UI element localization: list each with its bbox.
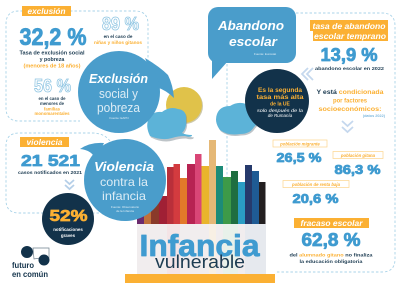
stat: 32,2 %: 32,2 %: [20, 24, 86, 51]
bubble: Violencia contra la infancia: infancia: [102, 189, 146, 203]
icon: chevrons down: [65, 180, 74, 189]
bubble: Abandono escolar: Abandono: [217, 19, 284, 33]
icon: blue cloud right: [216, 103, 260, 136]
stat: 20,6 %: 20,6 %: [292, 191, 339, 206]
stat: 56 %: 56 %: [34, 76, 71, 96]
stat: 89 %: 89 %: [102, 14, 139, 34]
text: menores: [34, 96, 70, 116]
circle: 52 %: 52%: [50, 208, 88, 225]
circle: segunda tasa: Es la segunda: [258, 88, 303, 94]
circle: segunda tasa: [245, 69, 309, 133]
text: tasa de exclusión: (menores de 18 años): [24, 64, 81, 70]
circle: 52 %: [42, 193, 94, 245]
text: casos notificados: casos notificados en 2021: [18, 170, 82, 176]
stat: 86,3 %: 86,3 %: [334, 162, 381, 177]
stat: 26,5 %: 26,5 %: [276, 150, 322, 165]
panel: violencia: [18, 137, 94, 245]
bubble: Violencia contra la infancia: de la Infancia: [116, 209, 134, 213]
circle: segunda tasa: de la UE: [270, 102, 291, 108]
text: menores: menores de: [40, 101, 65, 106]
text: alumnado gitano: la educación obligatoria: [300, 259, 363, 264]
text: niñas y niños: en el caso de: [104, 34, 133, 39]
text: tasa de exclusión: y pobreza: [40, 57, 64, 63]
pencils chart: [137, 140, 266, 225]
tag: población de renta baja: [283, 180, 349, 188]
text: tasa de exclusión: [20, 50, 85, 70]
text: menores: en el caso de: [38, 96, 66, 101]
logo: futuro en común: futuro: [12, 261, 34, 270]
bubble: Exclusión social y pobreza: Fuente: EAPN: [109, 116, 129, 120]
stat: 13,9 %: 13,9 %: [320, 45, 378, 65]
text: condicionada: (datos 2022): [363, 114, 386, 118]
tag: población gitana: población gitana: [340, 153, 376, 158]
bubble: Abandono escolar: escolar: [229, 35, 278, 49]
tag: tasa de abandono: escolar temprano: [314, 32, 386, 41]
circle: 52 %: notificaciones: [53, 227, 83, 232]
circle: segunda tasa: de Rumanía: [268, 113, 293, 118]
panel: abandono escolar temprano: [273, 20, 388, 264]
logo: futuro en común: [12, 246, 50, 279]
tag: población gitana: [333, 152, 383, 158]
text: menores: monomarentales: [34, 111, 70, 116]
bubble: Abandono escolar: Fuente: Eurostat: [254, 52, 276, 56]
text: condicionada: socioeconómicos:: [318, 106, 382, 113]
bubble: Violencia contra la infancia: Fuente: Observatorio: [111, 205, 139, 209]
tag: población migrante: población migrante: [279, 141, 320, 146]
text: niñas y niños: niñas y niños gitanos: [94, 40, 142, 45]
title panel: [137, 224, 266, 274]
text: condicionada: Y está condicionada: [316, 89, 384, 96]
bubble: Abandono escolar: [208, 7, 296, 79]
tag: tasa de abandono: tasa de abandono: [312, 22, 386, 31]
circle: segunda tasa: solo después de la: [257, 108, 304, 113]
icon: chevrons left: [302, 68, 313, 80]
text: alumnado gitano: [290, 252, 373, 264]
text: condicionada: por factores: [333, 98, 368, 104]
tag: exclusión: exclusión: [28, 7, 66, 16]
bubble: Exclusión social y pobreza: Exclusión: [89, 72, 148, 86]
title: Infancia: Infancia: [140, 228, 260, 263]
text: condicionada: [316, 89, 386, 118]
stat: 62,8 %: 62,8 %: [302, 230, 360, 250]
tag: población migrante: [273, 140, 327, 147]
text: alumnado gitano: del alumnado gitano no finaliza: [290, 252, 373, 258]
circle: segunda tasa: tasa más alta: [256, 95, 304, 101]
text: menores: familias: [44, 106, 61, 112]
icon: yellow speech shape: [166, 87, 203, 124]
panel: exclusión: [20, 6, 142, 116]
bubble: Violencia contra la infancia: Violencia: [94, 160, 154, 174]
tag: fracaso escolar: fracaso escolar: [300, 219, 363, 228]
bubble: Violencia contra la infancia: [80, 139, 166, 221]
tag: tasa de abandono: [310, 20, 388, 41]
bubble: Exclusión social y pobreza: pobreza: [97, 101, 140, 115]
circle: 52 %: graves: [61, 233, 76, 238]
orange footer bar: [125, 274, 275, 283]
icon: chevrons down: [342, 121, 353, 132]
bubble: Exclusión social y pobreza: social y: [99, 87, 139, 101]
bubble: Violencia contra la infancia: contra la: [100, 175, 148, 189]
title: vulnerable: vulnerable: [155, 252, 245, 272]
tag: población de renta baja: población de renta baja: [291, 182, 341, 187]
logo: futuro en común: en común: [12, 270, 48, 279]
text: abandono escolar en 2022: abandono escolar en 2022: [315, 66, 384, 72]
bubble: Exclusión social y pobreza: [78, 51, 174, 133]
text: tasa de exclusión: Tasa de exclusión social: [20, 50, 85, 56]
stat: 21 521: 21 521: [21, 153, 80, 170]
tag: violencia: violencia: [26, 138, 63, 147]
icon: blue cloud left: [147, 108, 194, 142]
text: niñas y niños: [94, 34, 142, 45]
